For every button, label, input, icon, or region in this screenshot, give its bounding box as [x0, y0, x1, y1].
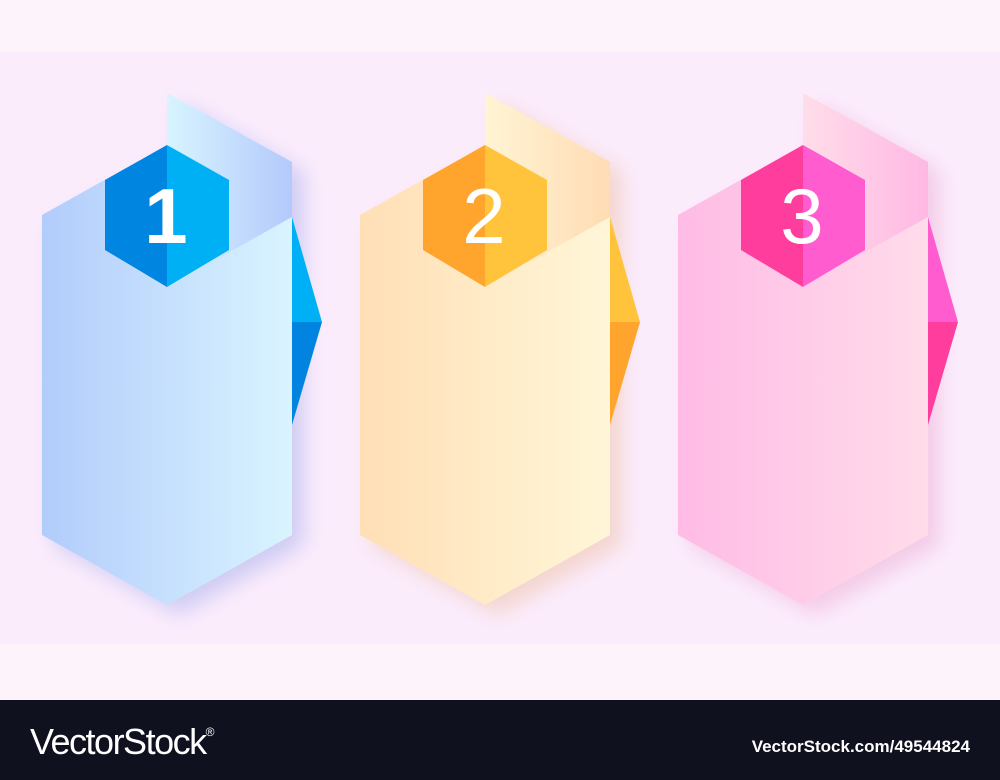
badge 2: 2 [462, 172, 506, 260]
arrow 1 [292, 217, 322, 425]
badge 1 [105, 145, 229, 287]
badge 3: 3 [780, 172, 824, 260]
arrow 2 [610, 217, 640, 425]
panel 2 [360, 93, 640, 605]
footer bar: VectorStock [30, 721, 206, 762]
footer bar: VectorStock.com/49544824 [752, 737, 971, 756]
footer bar: ® [206, 725, 215, 739]
badge 1: 1 [144, 172, 188, 260]
arrow 3 [928, 217, 958, 425]
background band [0, 52, 1000, 644]
footer bar [0, 700, 1000, 780]
badge 2 [423, 145, 547, 287]
panel 1 [42, 93, 322, 605]
badge 3 [741, 145, 865, 287]
panel 3 [678, 93, 958, 605]
